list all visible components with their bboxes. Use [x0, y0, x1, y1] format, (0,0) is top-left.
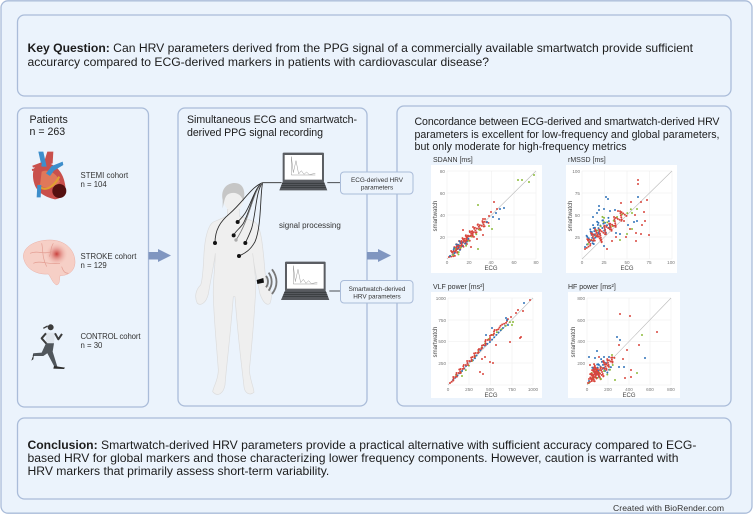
- conclusion text: Conclusion: Smartwatch-derived HRV parameters provide a practical alternative with sufficient accuracy compared to ECG-: [28, 438, 696, 452]
- label: signal processing: signal processing: [279, 221, 341, 230]
- chart: VLF power: 500: [486, 387, 494, 392]
- recording heading: Simultaneous ECG and smartwatch-: [187, 114, 357, 126]
- chart: VLF power: 1000: [436, 296, 446, 301]
- chart: HF power: 400: [625, 387, 633, 392]
- chart: VLF power: 250: [438, 361, 446, 366]
- chart: VLF power: 750: [508, 387, 516, 392]
- text: STROKE cohort: STROKE cohort: [80, 252, 136, 261]
- recording heading line 2: derived PPG signal recording: [187, 127, 323, 139]
- icon: head: [223, 183, 244, 211]
- chart: SDANN: 40: [440, 213, 445, 218]
- chart: HF power: smartwatch: [571, 327, 577, 357]
- chart: rMSSD: [566, 157, 677, 273]
- conclusion text: HRV markers that primarily assess short-term variability.: [28, 464, 329, 478]
- conclusion text: based HRV for global markers and those characterizing lower frequency components. However, caution is warranted with: [28, 451, 678, 465]
- chart: HF power: 800: [577, 296, 585, 301]
- chart: SDANN: 80: [533, 260, 539, 265]
- box: ECG-derived HRV parameters: ECG-derived HRV: [351, 177, 403, 184]
- icon: smartwatch: [257, 278, 264, 284]
- text: CONTROL n: n = 30: [80, 341, 103, 350]
- chart: SDANN: 20: [440, 235, 445, 240]
- key question text: accurarcy compared to ECG-derived markers in patients with cardiovascular disease?: [28, 55, 489, 69]
- chart: VLF power: [431, 284, 542, 399]
- chart: rMSSD: 50: [624, 260, 630, 265]
- chart: SDANN: SDANN [ms]: [433, 157, 473, 164]
- chart: SDANN: [431, 157, 542, 273]
- key question text: Key Question: Can HRV parameters derived from the PPG signal of a commercially available smartwatch provide sufficient: [28, 41, 693, 55]
- chart: HF power: 800: [667, 387, 675, 392]
- chart: HF power: 0: [586, 387, 588, 392]
- chart: VLF power: smartwatch: [433, 327, 439, 357]
- chart: SDANN: 60: [511, 260, 517, 265]
- chart: VLF power: ECG: [484, 393, 498, 399]
- text: CONTROL cohort: CONTROL cohort: [80, 332, 141, 341]
- box: ECG-derived HRV parameters: [340, 172, 413, 194]
- box: Smartwatch-derived HRV parameters: HRV parameters: [353, 294, 401, 300]
- patients heading: n = 263: [30, 126, 65, 138]
- chart: HF power: ECG: [622, 393, 636, 399]
- chart: rMSSD: ECG: [620, 266, 634, 272]
- chart: HF power: 400: [577, 339, 585, 344]
- chart: rMSSD: 25: [601, 260, 607, 265]
- chart: rMSSD: smartwatch: [568, 201, 574, 231]
- chart: rMSSD: 0: [581, 260, 583, 265]
- chart: rMSSD: 25: [575, 235, 580, 240]
- chart: SDANN: 40: [488, 260, 494, 265]
- chart: SDANN: 60: [440, 191, 445, 196]
- chart: rMSSD: rMSSD [ms]: [568, 157, 606, 164]
- icon: smartwatch laptop: [281, 262, 329, 300]
- chart: HF power: 600: [646, 387, 654, 392]
- chart: SDANN: smartwatch: [433, 201, 439, 231]
- chart: VLF power: 1000: [528, 387, 539, 392]
- box: Smartwatch-derived HRV parameters: Smartwatch-derived: [349, 286, 405, 293]
- chart: VLF power: 500: [438, 339, 446, 344]
- chart: SDANN: 80: [440, 169, 445, 174]
- text: STEMI cohort: n = 104: [80, 180, 107, 189]
- panel: recording: [178, 108, 367, 406]
- box: Smartwatch-derived HRV parameters: [340, 280, 413, 303]
- chart: SDANN: 20: [466, 260, 472, 265]
- chart: HF power: 600: [577, 318, 585, 323]
- chart: HF power: 200: [604, 387, 612, 392]
- text: STEMI cohort: STEMI cohort: [80, 171, 128, 180]
- chart: VLF power: 250: [465, 387, 473, 392]
- chart: HF power: [568, 284, 680, 399]
- chart: rMSSD: 50: [575, 213, 580, 218]
- panel: concordance: [397, 106, 731, 406]
- chart: VLF power: VLF power [ms²]: [433, 284, 484, 291]
- chart: rMSSD: 75: [646, 260, 652, 265]
- icon: heart: [32, 152, 66, 199]
- credit: Created with BioRender.com: [613, 503, 724, 513]
- concordance heading line 3: but only moderate for high-frequency metrics: [414, 141, 626, 153]
- ECG leads: [215, 183, 282, 256]
- panel: patients: [18, 108, 148, 407]
- icon: human body: [196, 209, 271, 394]
- chart: rMSSD: 100: [572, 169, 580, 174]
- arrow: patients to recording: [148, 249, 171, 262]
- icon: ECG laptop: [279, 153, 327, 190]
- panel: conclusion: [18, 418, 731, 499]
- icon: brain with stroke: [23, 240, 75, 285]
- chart: HF power: 200: [577, 361, 585, 366]
- chart: SDANN: ECG: [484, 266, 498, 272]
- panel: key question: [18, 15, 731, 96]
- body figure with electrodes: [196, 153, 340, 394]
- chart: SDANN: 0: [446, 260, 448, 265]
- chart: VLF power: 0: [447, 387, 449, 392]
- chart: rMSSD: 75: [575, 191, 580, 196]
- patients heading: Patients: [30, 114, 68, 126]
- arrow: recording to concordance: [367, 249, 391, 262]
- box: ECG-derived HRV parameters: parameters: [361, 184, 393, 192]
- chart: rMSSD: 100: [667, 260, 675, 265]
- icon: wireless signal: [266, 269, 276, 294]
- icon: runner: [31, 324, 65, 369]
- chart: VLF power: 750: [438, 318, 446, 323]
- concordance heading line 1: Concordance between ECG-derived and smartwatch-derived HRV: [414, 116, 720, 128]
- concordance heading line 2: parameters is excellent for low-frequency and global parameters,: [414, 129, 720, 141]
- text: STROKE cohort: n = 129: [80, 261, 107, 270]
- chart: HF power: HF power [ms²]: [568, 284, 616, 291]
